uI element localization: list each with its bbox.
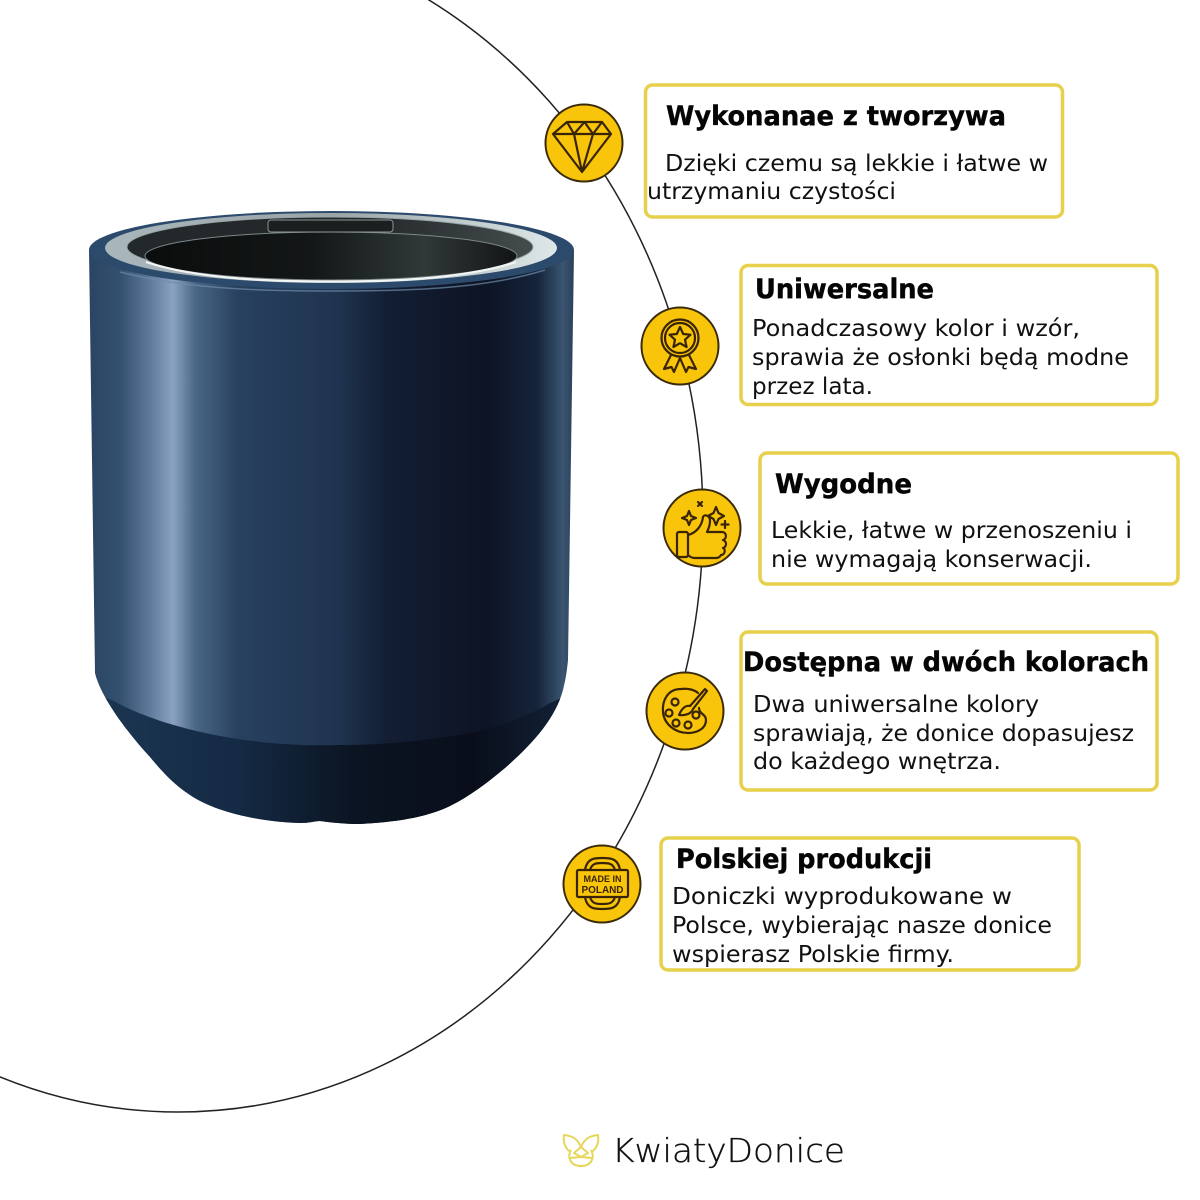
- curved connector line: [0, 0, 703, 1112]
- body text: utrzymaniu czystości: [647, 179, 896, 205]
- pot body: [80, 240, 580, 840]
- body text: Ponadczasowy kolor i wzór,: [752, 316, 1080, 342]
- pot rim: [89, 211, 574, 291]
- brand name: KwiatyDonice: [612, 1131, 845, 1170]
- body text: [753, 692, 1134, 775]
- body text: sprawiają, że donice dopasujesz: [753, 721, 1134, 747]
- icon: medal with star: [642, 308, 718, 384]
- icon: butterfly logo: [564, 1135, 598, 1166]
- body text: [647, 151, 1048, 205]
- icon: made in Poland stamp: POLAND: [582, 885, 624, 896]
- heading: Wykonanae z tworzywa: [666, 101, 1006, 132]
- heading: Polskiej produkcji: [676, 844, 932, 875]
- icon: paint palette and brush: [646, 672, 724, 750]
- body text: przez lata.: [752, 374, 873, 400]
- body text: wspierasz Polskie firmy.: [672, 942, 954, 968]
- body text: [771, 518, 1132, 573]
- product: navy plant pot: [80, 211, 580, 840]
- logo: KwiatyDonice: [564, 1131, 845, 1170]
- icon: made in Poland stamp: [564, 846, 640, 922]
- body text: Lekkie, łatwe w przenoszeniu i: [771, 518, 1132, 544]
- heading: Wygodne: [775, 469, 912, 500]
- panel: Polskiej produkcji: [661, 838, 1079, 970]
- panel: Wygodne: [760, 453, 1178, 584]
- body text: Dzięki czemu są lekkie i łatwe w: [665, 151, 1048, 177]
- body text: Doniczki wyprodukowane w: [672, 884, 1012, 910]
- heading: Dostępna w dwóch kolorach: [743, 647, 1149, 678]
- body text: do każdego wnętrza.: [753, 749, 1001, 775]
- body text: Polsce, wybierając nasze donice: [672, 913, 1052, 939]
- body text: nie wymagają konserwacji.: [771, 547, 1092, 573]
- icon: diamond: [546, 104, 622, 182]
- panel: Uniwersalne: [741, 266, 1157, 404]
- body text: [672, 884, 1052, 968]
- panel: Dostępna w dwóch kolorach: [741, 632, 1157, 790]
- body text: Dwa uniwersalne kolory: [753, 692, 1039, 718]
- panel: Wykonanae z tworzywa: [646, 85, 1062, 217]
- heading: Uniwersalne: [755, 274, 934, 305]
- icon: made in Poland stamp: MADE IN: [584, 874, 622, 884]
- icon: thumbs up with sparkles: [664, 490, 740, 566]
- body text: [752, 316, 1129, 400]
- body text: sprawia że osłonki będą modne: [752, 345, 1129, 371]
